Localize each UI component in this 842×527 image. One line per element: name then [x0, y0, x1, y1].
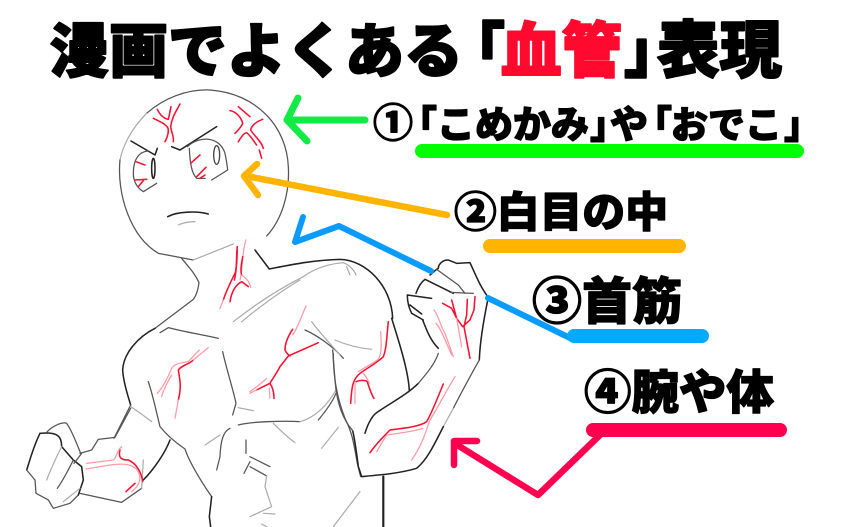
label 1: ① [373, 102, 413, 146]
label 4: ④腕や体 [584, 366, 774, 419]
label 1: や [610, 105, 648, 147]
title: 血管 [501, 18, 622, 85]
label 1 [373, 102, 822, 147]
arrow: pink [454, 433, 602, 495]
left forearm and fist [27, 408, 143, 508]
torso [114, 250, 393, 527]
arrow: orange [244, 164, 447, 215]
arrow: blue [295, 217, 570, 338]
label 1: 」 [784, 105, 822, 147]
title: 「 [445, 18, 505, 85]
title: 」 [624, 18, 684, 85]
title: 表現 [657, 17, 782, 86]
label 1: おでこ [671, 105, 782, 146]
arrow: green [287, 98, 365, 141]
raised right arm and fist [333, 260, 488, 477]
label 2: ②白目の中 [454, 189, 668, 236]
underline: orange [483, 239, 686, 253]
title: 漫画でよくある [50, 19, 463, 85]
underline: green [415, 144, 804, 158]
label 1: 「 [399, 105, 437, 147]
underline: blue [567, 329, 709, 343]
head and face [119, 90, 289, 280]
label 1: こめかみ [437, 105, 589, 147]
label 1: 「 [634, 105, 672, 147]
label 3: ③首筋 [532, 274, 682, 330]
illustration: muscular figure with veins [27, 90, 488, 527]
underline: pink [586, 423, 787, 437]
title [50, 17, 782, 86]
label 1: 」 [590, 105, 628, 147]
